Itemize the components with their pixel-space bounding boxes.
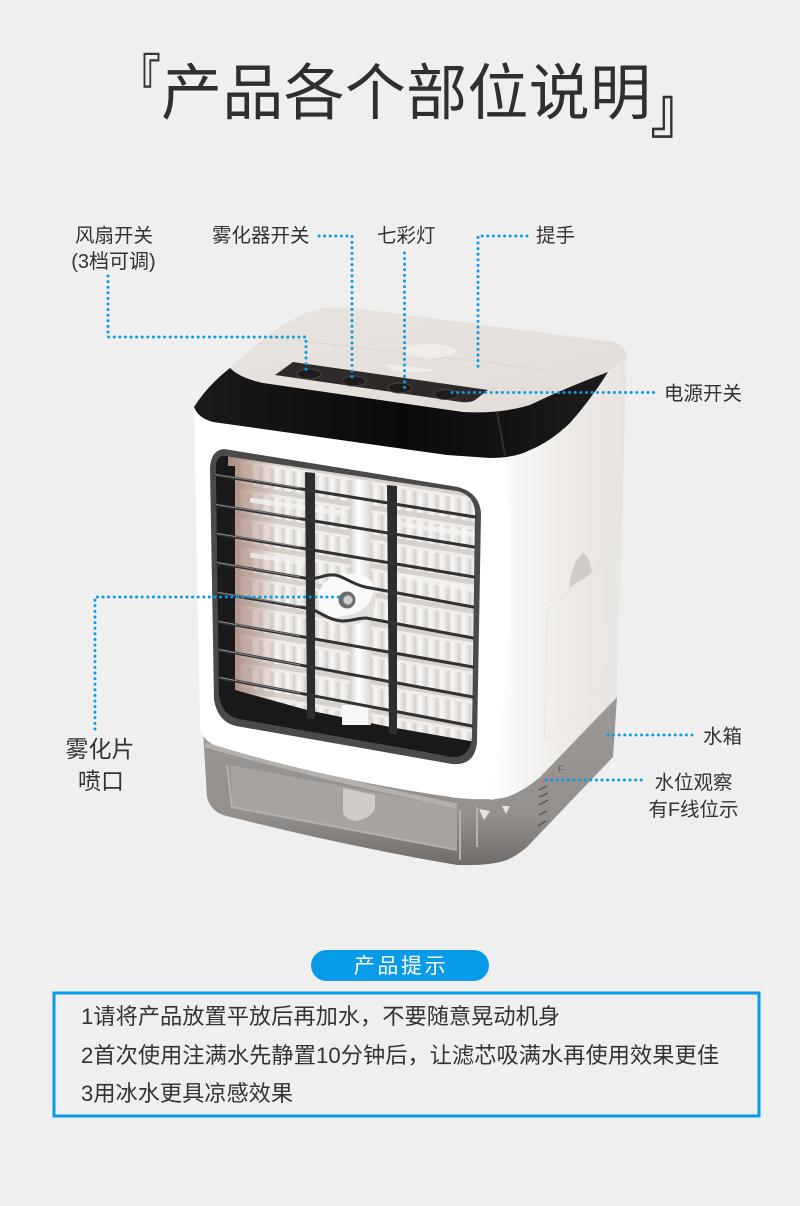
tips text — [81, 1004, 719, 1106]
tips text: 3用冰水更具凉感效果 — [81, 1081, 293, 1106]
label: seven colour light: 七彩灯 — [377, 225, 436, 247]
callout lines — [95, 236, 695, 780]
vertical posts — [305, 472, 397, 735]
label: handle: 提手 — [536, 225, 575, 247]
panel buttons — [297, 369, 458, 400]
tips text: 2首次使用注满水先静置10分钟后，让滤芯吸满水再使用效果更佳 — [81, 1043, 719, 1068]
label: atomizer sheet nozzle — [66, 736, 134, 794]
grille frame — [210, 449, 481, 764]
water tank: F — [558, 764, 564, 774]
label: atomizer switch: 雾化器开关 — [212, 225, 310, 247]
fan grille — [210, 449, 481, 770]
tips text: 1请将产品放置平放后再加水，不要随意晃动机身 — [81, 1004, 560, 1029]
top seam — [270, 337, 567, 372]
water tank — [203, 697, 617, 865]
label: atomizer sheet nozzle: 雾化片 — [66, 736, 134, 762]
label: atomizer sheet nozzle: 喷口 — [78, 768, 124, 794]
white body — [194, 340, 627, 800]
inner wick — [343, 788, 375, 821]
filter behind grille — [214, 450, 478, 770]
title: 产品各个部位说明 — [161, 59, 651, 127]
tips box — [54, 993, 759, 1116]
label: fan switch: 风扇开关 — [75, 225, 153, 247]
product illustration: air cooler — [194, 307, 627, 865]
side handle notch — [569, 553, 592, 588]
label: water tank: 水箱 — [703, 726, 742, 748]
dark left wall — [216, 456, 235, 690]
label: three speed: (3档可调) — [71, 250, 156, 273]
dark floor — [220, 690, 472, 757]
tips pill heading: 产品提示 — [354, 955, 448, 978]
water level scale and F line — [538, 771, 556, 826]
tips section — [54, 950, 759, 1116]
white slats — [250, 500, 475, 535]
top handle recess — [404, 344, 456, 358]
grille bars — [215, 474, 475, 726]
centre pole — [350, 480, 371, 725]
title: 』 — [650, 77, 705, 146]
label: water level: 水位观察 — [654, 772, 733, 794]
top cover — [230, 307, 627, 412]
label: power switch: 电源开关 — [664, 383, 742, 405]
title: 『 — [119, 50, 161, 108]
black band — [194, 368, 608, 458]
side panel outline — [545, 560, 607, 740]
labels — [66, 225, 742, 821]
control panel — [275, 362, 488, 402]
label: water level — [649, 772, 738, 821]
tank teeth — [479, 806, 510, 820]
infographic canvas — [52, 52, 760, 1118]
title — [119, 50, 705, 146]
label: water level: 有F线位示 — [649, 799, 738, 821]
nozzle — [318, 574, 376, 625]
tips pill heading — [311, 950, 489, 981]
